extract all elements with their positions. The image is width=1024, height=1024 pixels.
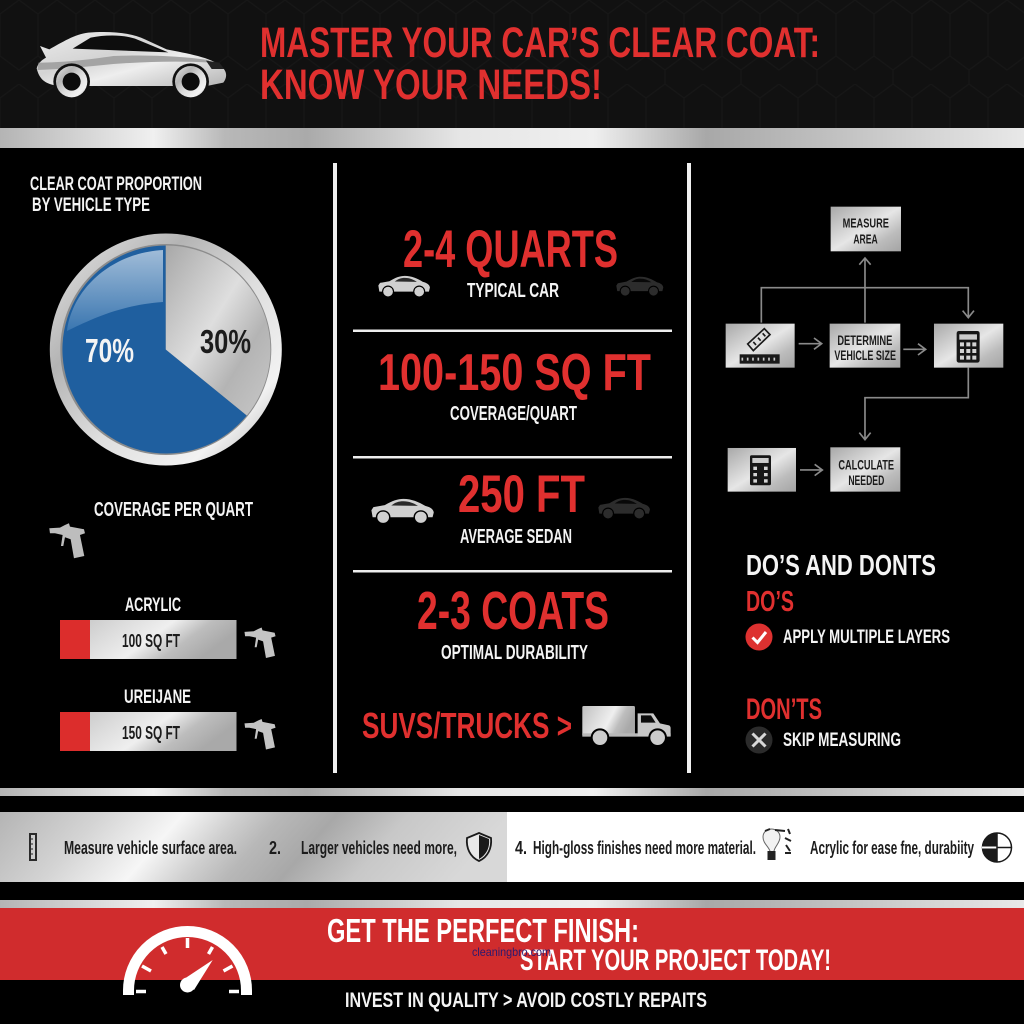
header panel — [0, 0, 1024, 128]
urethane bar — [60, 687, 236, 751]
acrylic bar: ACRYLIC — [125, 595, 181, 616]
stat: coats — [417, 581, 609, 664]
gloss highlight — [67, 250, 163, 331]
icon: ruler — [29, 833, 37, 861]
tip 1: Measure vehicle surface area. — [64, 838, 237, 858]
stat: sedan: AVERAGE SEDAN — [460, 526, 572, 548]
do's: DO’S — [746, 586, 794, 618]
acrylic bar — [60, 595, 236, 659]
pie heading — [30, 174, 202, 216]
icon: speedometer — [128, 932, 246, 995]
box: measure area: MEASURE — [843, 215, 889, 230]
icon: quartered circle — [982, 833, 1012, 862]
icon: check — [746, 624, 772, 650]
pie heading: BY VEHICLE TYPE — [32, 195, 150, 216]
icon: silver sports car — [37, 32, 226, 100]
icon: dark car — [616, 277, 663, 297]
icon: light bulb — [763, 829, 791, 860]
connector arrows — [761, 258, 974, 476]
urethane bar: 150 SQ FT — [122, 723, 180, 743]
box: calculator icon — [934, 324, 1003, 368]
box: calculate needed — [830, 447, 900, 492]
call to action banner — [0, 908, 1024, 995]
box: ruler icon — [726, 324, 795, 368]
stat: coats: 2-3 COATS — [417, 581, 609, 641]
stat: quarts: TYPICAL CAR — [467, 280, 559, 302]
icon: light car — [378, 276, 430, 298]
box: determine vehicle size: DETERMINE — [837, 333, 892, 348]
tips strip — [0, 812, 1024, 882]
title: MASTER YOUR CAR’S CLEAR COAT: — [260, 19, 820, 67]
don'ts: SKIP MEASURING — [783, 729, 901, 751]
30% label: 30% — [200, 323, 251, 360]
do's — [746, 586, 950, 650]
box: calculate needed: CALCULATE — [838, 457, 894, 472]
tip 2: 2. — [269, 838, 281, 858]
stat: coverage: COVERAGE/QUART — [450, 403, 577, 425]
urethane bar: UREIJANE — [124, 687, 191, 708]
acrylic bar: 100 SQ FT — [122, 631, 180, 651]
panel: do's and don'ts — [746, 550, 950, 754]
panel: flowchart — [726, 207, 1003, 492]
panel: proportion and coverage — [30, 174, 282, 751]
icon: spray gun — [244, 628, 276, 658]
do's: APPLY MULTIPLE LAYERS — [783, 626, 950, 648]
tip 4 — [515, 838, 756, 858]
box: determine vehicle size: VEHICLE SIZE — [834, 348, 896, 363]
stat: quarts — [378, 220, 663, 302]
box: determine vehicle size — [830, 324, 900, 368]
box: calculator icon lower — [728, 448, 796, 492]
watermark: cleaningbro.com — [472, 945, 551, 959]
headline: GET THE PERFECT FINISH: — [327, 912, 639, 949]
stat: coverage: 100-150 SQ FT — [378, 344, 651, 402]
box: calculate needed: NEEDED — [848, 473, 884, 488]
panel: do's and don'ts: DO’S AND DONTS — [746, 550, 936, 582]
icon: cross — [746, 726, 772, 754]
stat: quarts: 2-4 QUARTS — [403, 220, 618, 279]
box: measure area — [831, 207, 901, 251]
pie chart: 70 / 30 — [50, 234, 282, 466]
title — [260, 19, 820, 109]
don'ts: DON’TS — [746, 693, 822, 726]
coverage heading: COVERAGE PER QUART — [94, 499, 253, 521]
tip 4: High-gloss finishes need more material. — [533, 838, 756, 858]
box: measure area: AREA — [853, 231, 878, 246]
tip 2: Larger vehicles need more, — [301, 838, 457, 858]
panel: key figures — [353, 220, 672, 747]
subheadline: START YOUR PROJECT TODAY! — [520, 944, 831, 977]
icon: spray gun — [244, 719, 276, 749]
stat: SUVs and trucks: SUVS/TRUCKS > — [362, 705, 572, 746]
tip 4: 4. — [515, 838, 527, 858]
icon: spray gun — [49, 523, 85, 558]
icon: shield — [467, 833, 491, 861]
icon: dark car — [598, 498, 650, 520]
pie heading: CLEAR COAT PROPORTION — [30, 174, 202, 195]
stat: coats: OPTIMAL DURABILITY — [441, 642, 588, 664]
stat: coverage — [378, 344, 651, 425]
don'ts — [746, 693, 901, 754]
closing tagline: INVEST IN QUALITY > AVOID COSTLY REPAITS — [345, 989, 707, 1012]
icon: light car — [371, 499, 434, 524]
stat: sedan — [371, 465, 650, 548]
stat: sedan: 250 FT — [458, 465, 585, 524]
title: KNOW YOUR NEEDS! — [260, 61, 602, 109]
icon: truck — [582, 706, 671, 747]
70% label: 70% — [85, 332, 134, 369]
tip 2 — [269, 838, 457, 858]
